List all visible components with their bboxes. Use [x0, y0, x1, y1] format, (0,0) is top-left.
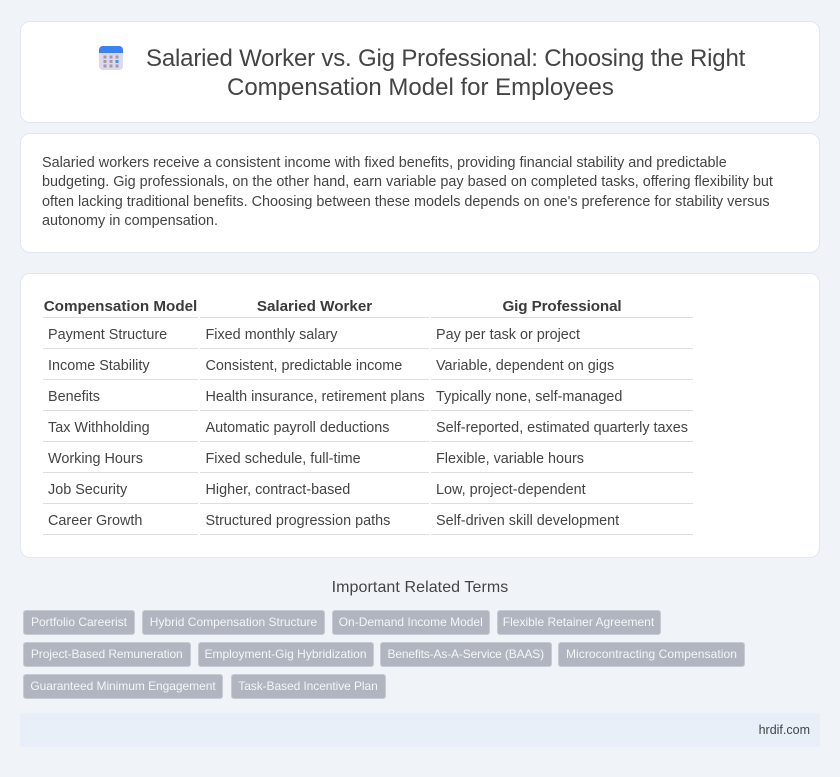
intro text: Salaried workers receive a consistent income with fixed benefits, providing financial stability and predictable	[42, 155, 727, 171]
related term tags: Microcontracting Compensation	[566, 647, 737, 661]
header panel	[20, 21, 820, 123]
comparison table: Fixed schedule, full-time	[206, 450, 361, 466]
table panel	[20, 273, 820, 558]
title: Salaried Worker vs. Gig Professional: Choosing the Right	[146, 44, 745, 72]
comparison table: Gig Professional	[502, 298, 622, 315]
intro text: autonomy in compensation.	[42, 213, 218, 229]
footer source: hrdif.com	[759, 722, 810, 736]
related terms heading: Important Related Terms	[332, 579, 508, 596]
title	[146, 44, 746, 101]
comparison table: Career Growth	[48, 512, 142, 528]
intro panel	[20, 133, 820, 253]
icon: calendar	[99, 46, 123, 70]
intro text: budgeting. Gig professionals, on the other hand, earn variable pay based on completed tasks, offering flexibility but	[42, 174, 773, 190]
related term tags: Benefits-As-A-Service (BAAS)	[387, 647, 544, 661]
title: Compensation Model for Employees	[227, 74, 614, 101]
comparison table: Higher, contract-based	[206, 482, 350, 498]
comparison table: Compensation Model	[44, 298, 197, 315]
comparison table: Payment Structure	[48, 326, 167, 342]
related term tags: Guaranteed Minimum Engagement	[30, 679, 216, 693]
comparison table: Working Hours	[48, 450, 143, 466]
related term tags: Project-Based Remuneration	[31, 647, 183, 661]
comparison table: Variable, dependent on gigs	[436, 358, 614, 374]
intro text: often lacking traditional benefits. Choosing between these models depends on one's preference for stability versus	[42, 194, 770, 210]
comparison table: Pay per task or project	[436, 326, 580, 342]
comparison table: Typically none, self-managed	[436, 388, 622, 404]
intro text	[42, 155, 773, 229]
comparison table: Income Stability	[48, 358, 150, 374]
comparison table	[43, 298, 693, 535]
related term tags: On-Demand Income Model	[339, 615, 483, 629]
comparison table: Benefits	[48, 388, 100, 404]
related term tags: Portfolio Careerist	[31, 615, 127, 629]
comparison table: Flexible, variable hours	[436, 450, 584, 466]
comparison table: Salaried Worker	[257, 298, 372, 315]
comparison table: Low, project-dependent	[436, 482, 586, 498]
comparison table: Structured progression paths	[206, 512, 390, 528]
comparison table: Self-reported, estimated quarterly taxes	[436, 420, 688, 436]
footer bar	[20, 713, 820, 746]
comparison table: Job Security	[48, 482, 127, 498]
comparison table: Health insurance, retirement plans	[206, 388, 425, 404]
related term tags: Flexible Retainer Agreement	[503, 615, 654, 629]
comparison table: Tax Withholding	[48, 420, 150, 436]
comparison table: Automatic payroll deductions	[206, 420, 389, 436]
related term tags	[23, 610, 745, 699]
comparison table: Self-driven skill development	[436, 512, 619, 528]
related term tags: Task-Based Incentive Plan	[238, 679, 378, 693]
related term tags: Hybrid Compensation Structure	[150, 615, 317, 629]
comparison table: Consistent, predictable income	[206, 358, 402, 374]
related term tags: Employment-Gig Hybridization	[204, 647, 367, 661]
comparison table: Fixed monthly salary	[206, 326, 337, 342]
